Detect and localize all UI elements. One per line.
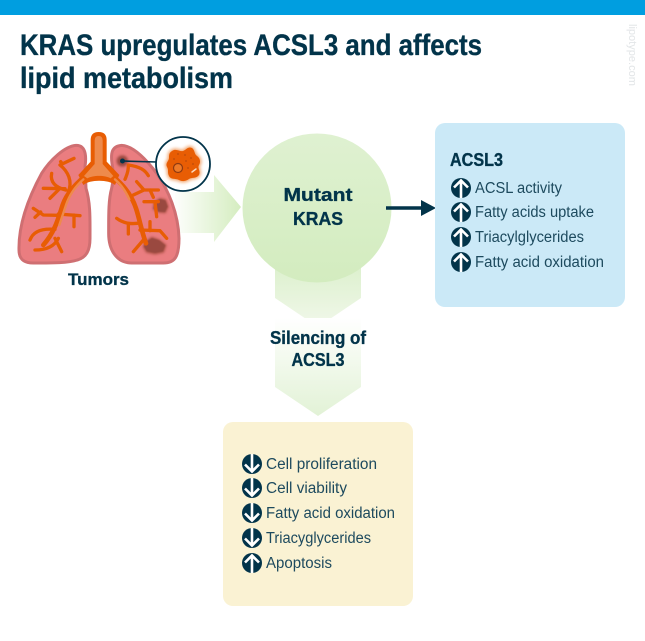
title	[20, 29, 482, 95]
top color bar	[0, 0, 645, 15]
arrow: KRAS to ACSL3	[386, 200, 436, 216]
label: Silencing of ACSL3	[270, 328, 367, 370]
row: ACSL activity up: ACSL activity	[475, 180, 562, 197]
row: Triacyglycerides down: Triacyglycerides	[266, 530, 371, 547]
row: Fatty acids uptake up	[451, 202, 594, 222]
label: Mutant KRAS: KRAS	[293, 208, 343, 229]
row: Triacylglycerides up: Triacylglycerides	[475, 229, 584, 246]
arrow: mutant KRAS down to silencing	[275, 265, 361, 327]
row: Fatty acid oxidation down	[242, 503, 395, 523]
label: Silencing of ACSL3: ACSL3	[292, 350, 344, 370]
arrow: silencing of ACSL3 to outcomes	[275, 318, 361, 416]
trachea and bronchi	[43, 177, 146, 245]
title: lipid metabolism	[20, 62, 233, 95]
label: Mutant KRAS	[284, 184, 352, 229]
panel: effects of silencing	[223, 422, 413, 606]
left lung	[19, 145, 90, 263]
heading: ACSL3: ACSL3	[450, 150, 503, 170]
row: Cell viability down: Cell viability	[266, 480, 347, 497]
panel: ACSL3	[435, 123, 625, 307]
label: Silencing of ACSL3: Silencing of	[270, 328, 367, 348]
row: Fatty acids uptake up: Fatty acids uptake	[475, 204, 594, 221]
row: Fatty acid oxidation up	[451, 252, 604, 272]
circle: mutant KRAS	[242, 134, 392, 282]
icon: lungs with tumors	[19, 132, 179, 263]
arrow: lungs to mutant KRAS	[175, 175, 241, 242]
label: Tumors: Tumors	[68, 270, 129, 289]
row: Triacylglycerides up	[451, 227, 584, 247]
row: Cell proliferation down	[242, 454, 377, 474]
title: KRAS upregulates ACSL3 and affects	[20, 29, 482, 62]
row: Apoptosis up: Apoptosis	[266, 555, 332, 572]
row: Apoptosis up	[242, 553, 332, 573]
row: Cell proliferation down: Cell proliferation	[266, 456, 377, 473]
bronchial branches	[30, 158, 167, 252]
tumor masses	[117, 155, 169, 255]
row: ACSL activity up	[451, 178, 562, 198]
tumor callout: magnified cell	[120, 137, 210, 191]
row: Fatty acid oxidation down: Fatty acid oxidation	[266, 505, 395, 522]
watermark: lipotype.com: lipotype.com	[626, 24, 638, 86]
row: Fatty acid oxidation up: Fatty acid oxidation	[475, 254, 604, 271]
row: Cell viability down	[242, 478, 347, 498]
right lung	[109, 145, 179, 263]
label: Mutant KRAS: Mutant	[284, 184, 352, 205]
row: Triacyglycerides down	[242, 528, 371, 548]
